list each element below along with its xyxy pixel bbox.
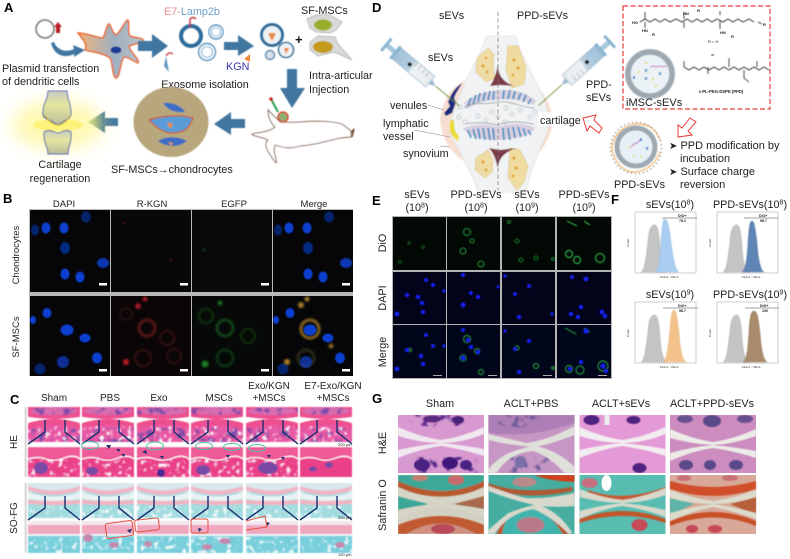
text: group headings: +MSCs — [252, 393, 286, 404]
text: group headings: Sham — [426, 398, 454, 410]
histogram: sEVs 10^8: Count — [626, 239, 630, 247]
text: column headings: ) — [592, 202, 596, 214]
arrow: injection to differentiation — [214, 112, 245, 135]
text: syringe label PPD-sEVs: PPD- — [586, 79, 612, 91]
micrograph: SF-MSCs merge — [273, 296, 353, 376]
divider: dashed center line — [497, 12, 499, 190]
text: venules: venules — [390, 100, 428, 112]
arrow: outlined red to cartilage — [583, 115, 602, 133]
panel B: fluorescence micrographs — [3, 191, 353, 376]
icon: regenerating joint — [12, 91, 104, 154]
histogram: PPD-sEVs 10^8: DiO+ — [759, 214, 768, 218]
panel letter C: C — [10, 392, 20, 407]
text: column headings: (10 — [464, 202, 480, 214]
micrograph: SF-MSCs R-KGN — [111, 296, 191, 376]
text: bullet PPD modification: ➤ PPD modification by — [669, 140, 780, 152]
icon: PPD-sEV vesicle — [610, 122, 662, 174]
histogram: PPD-sEVs 10^8: Count — [708, 239, 712, 247]
text: column headings: PPD-sEVs — [450, 189, 502, 201]
text: group headings: Exo/KGN — [248, 381, 290, 392]
micrograph: sEVs H&E — [580, 415, 666, 473]
histogram: PPD-sEVs 10^8: 98.7 — [760, 219, 767, 223]
text: row label DAPI: DAPI — [377, 285, 389, 311]
text: row label SO-FG: SO-FG — [9, 502, 20, 534]
histogram: PPD-sEVs 10^9: DiO+ — [760, 304, 768, 308]
text: reversion: reversion — [680, 179, 725, 191]
chemical structure: PEG-DSPE — [684, 58, 769, 82]
text: histogram heading PPD-sEVs 10^9: 9 — [780, 290, 784, 296]
histogram: sEVs 10^9: 98.7 — [679, 309, 686, 313]
arrow: cell to exosome — [138, 34, 168, 58]
icon: dendritic cell — [78, 20, 143, 78]
text: SF-MSCs to chondrocytes: SF-MSCs→chondrocytes — [111, 164, 233, 176]
icon: mouse outline with injection — [252, 97, 354, 163]
text: scale labels: 200 μm — [338, 515, 352, 520]
micrograph frame backdrop — [392, 216, 612, 379]
text: row label Safranin O: Safranin O — [377, 479, 389, 531]
micrograph: chondrocytes EGFP — [192, 210, 272, 292]
text: KGN: KGN — [226, 61, 249, 73]
text: histogram heading PPD-sEVs 10^9: ) — [783, 289, 787, 301]
text: group headings: +MSCs — [316, 393, 350, 404]
text: histogram heading sEVs 10^8: sEVs(10 — [646, 199, 687, 211]
histogram: sEVs 10^8: 78.2 — [679, 219, 686, 223]
text: regeneration: regeneration — [30, 173, 90, 185]
panel F: flow cytometry histograms — [611, 192, 787, 369]
text: chemistry atom labels: HO — [632, 20, 638, 25]
text: histogram heading sEVs 10^8: 8 — [687, 200, 691, 206]
text: group headings: ACLT+PPD-sEVs — [670, 398, 755, 410]
text: column headings: 9 — [531, 202, 535, 210]
arrow: exosome to KGN loading — [224, 35, 254, 56]
arrow: down to injection — [280, 69, 305, 108]
zoom guide lines — [28, 420, 352, 520]
histogram: PPD-sEVs 10^9 — [708, 302, 779, 369]
micrograph: sham Safranin O — [398, 475, 484, 534]
text: row label DiO: DiO — [377, 234, 389, 252]
text: histogram heading sEVs 10^9: sEVs(10 — [646, 289, 687, 301]
text: column headings: ) — [425, 202, 429, 214]
text: chemistry atom labels: HN — [683, 11, 689, 16]
micrograph: PPD-sEVs Safranin O — [669, 475, 757, 534]
icon: left syringe — [380, 38, 465, 112]
text: histogram heading PPD-sEVs 10^8: PPD-sEVs(10 — [713, 199, 780, 211]
panel letter E: E — [372, 193, 381, 208]
text: histogram heading sEVs 10^9: ) — [691, 289, 694, 301]
text: group headings: ACLT+PBS — [504, 398, 558, 410]
panel A: exosome schematic — [2, 0, 373, 185]
text: column headings: DAPI — [53, 199, 75, 210]
micrograph: PBS Safranin O — [488, 475, 575, 534]
box: iMSC-sEVs composition — [623, 6, 770, 109]
arrow: outlined red down-left — [678, 118, 696, 137]
text: chemistry atom labels: HN — [642, 28, 648, 33]
micrograph: PBS H&E — [488, 415, 575, 473]
icon: engineered exosomes — [164, 18, 223, 72]
image row: SO-FG — [25, 483, 352, 553]
text: R equals H: R = H — [708, 39, 718, 44]
text: chemistry atom labels — [632, 8, 766, 39]
histogram: sEVs 10^8 — [626, 212, 697, 279]
micrograph: chondrocytes R-KGN — [111, 210, 191, 292]
micrograph: chondrocytes merge — [273, 210, 353, 292]
text: vessel: vessel — [383, 131, 414, 143]
image row: HE — [25, 407, 352, 477]
text: group headings: PBS — [100, 393, 120, 404]
text: scale labels: 100 μm — [338, 552, 352, 557]
label: cartilage: cartilage — [540, 115, 581, 127]
histogram: sEVs 10^8: FL2-A :: PE-A — [660, 275, 678, 279]
histogram: PPD-sEVs 10^8 — [708, 212, 778, 279]
text: histogram heading sEVs 10^8: ) — [691, 199, 694, 211]
icon: iMSC-sEV vesicle — [625, 49, 675, 99]
text: or: or — [711, 52, 715, 57]
micrograph: PPD-sEVs H&E — [670, 415, 756, 473]
arrow: plasmid to cell — [51, 42, 85, 57]
text: group headings — [426, 398, 755, 410]
panel letter A: A — [4, 0, 14, 15]
icon: differentiated SF-MSCs disc — [134, 87, 208, 157]
micrograph: SF-MSCs EGFP — [192, 296, 272, 376]
text: row label HE: HE — [9, 435, 20, 449]
icon: loaded exosomes — [262, 24, 294, 60]
panel E: confocal uptake images — [372, 189, 612, 379]
text: column headings: ) — [484, 202, 488, 214]
text: plus sign: + — [295, 32, 303, 47]
panel letter D: D — [372, 0, 381, 15]
text: E7-Lamp2b: E7-Lamp2b — [164, 6, 220, 18]
icon: SF-MSC cells — [307, 15, 352, 60]
text: row label chondrocytes: Chondrocytes — [11, 225, 22, 284]
micrograph: chondrocytes DAPI — [30, 210, 110, 292]
leader lines — [414, 105, 450, 147]
text: intra-articular injection: Intra-articular — [309, 70, 373, 82]
text: scale labels: 200 μm — [338, 442, 352, 447]
white backing behind cartilage label — [538, 112, 585, 126]
micrograph: SF-MSCs DAPI — [30, 296, 110, 376]
panel letter G: G — [372, 391, 382, 406]
text: PPD-sEVs heading: PPD-sEVs — [517, 10, 569, 22]
icon: KGN triangle — [244, 54, 250, 62]
histogram: PPD-sEVs 10^9: FL2-A :: PE-A — [742, 365, 760, 369]
text: sEVs heading: sEVs — [439, 10, 465, 22]
histogram: sEVs 10^9: DiO+ — [678, 304, 686, 308]
text: column headings: (10 — [515, 202, 531, 214]
text: chemistry atom labels: HN — [720, 30, 726, 35]
text: column headings: (10 — [405, 202, 421, 214]
histogram: sEVs 10^9 — [626, 302, 698, 369]
text: histogram heading PPD-sEVs 10^9: PPD-sEVs(10 — [713, 289, 780, 301]
text: SF-MSCs: SF-MSCs — [301, 5, 348, 17]
text: column headings: sEVs — [514, 189, 540, 201]
text: column headings: sEVs — [404, 189, 430, 201]
text: plasmid transfection: Plasmid transfection — [2, 63, 99, 75]
text: chemistry atom labels: R — [731, 34, 734, 39]
text: bullet surface charge: ➤ Surface charge — [669, 166, 755, 178]
panel G: joint histology — [372, 391, 756, 534]
text: exosome isolation: Exosome isolation — [161, 79, 249, 91]
text: row label Merge: Merge — [377, 337, 389, 367]
micrograph: sEVs Safranin O — [579, 475, 666, 534]
chemical structure: polylysine — [640, 11, 762, 29]
panel letter B: B — [3, 191, 12, 206]
text: column headings: 9 — [588, 202, 592, 210]
histogram: PPD-sEVs 10^9: 100 — [762, 309, 768, 313]
text: histogram heading PPD-sEVs 10^8: ) — [783, 199, 787, 211]
annotation: green lesion ovals — [82, 442, 266, 452]
text: column headings: Merge — [301, 199, 327, 210]
text: chemistry atom labels: R — [763, 22, 766, 27]
text: PPD compound name: ε-PL-PEG-DSPE (PPD) — [699, 89, 744, 94]
text: column headings: PPD-sEVs — [558, 189, 610, 201]
micrograph frame backdrop — [29, 209, 353, 376]
text: incubation: incubation — [680, 153, 730, 165]
text: chemistry atom labels: R — [652, 32, 655, 37]
text: column headings — [53, 199, 327, 210]
text: group headings: MSCs — [205, 393, 233, 404]
text: column headings: R-KGN — [137, 199, 167, 210]
annotation: red lesion boxes — [105, 516, 267, 539]
text: column headings — [404, 189, 610, 214]
micrograph: sham H&E — [398, 415, 484, 473]
micrograph grid: DiO — [393, 217, 611, 270]
panel C: histology — [9, 381, 362, 557]
text: syringe label sEVs: sEVs — [428, 52, 454, 64]
panel D: joint schematic — [372, 0, 780, 192]
text: column headings: 8 — [421, 202, 425, 210]
text: row label SF-MSCs: SF-MSCs — [11, 316, 22, 358]
text: iMSC-sEVs: iMSC-sEVs — [626, 97, 683, 109]
histogram: PPD-sEVs 10^8: FL2-A :: PE-A — [742, 275, 760, 279]
text: column headings: ) — [535, 202, 539, 214]
panel letter F: F — [611, 192, 619, 207]
arrow: to regeneration — [88, 111, 118, 133]
text: group headings: ACLT+sEVs — [592, 398, 651, 410]
histogram: PPD-sEVs 10^9: Count — [708, 329, 712, 337]
text: group headings: Exo — [150, 393, 168, 404]
text: group headings: E7-Exo/KGN — [304, 381, 362, 392]
text: column headings: (10 — [572, 202, 588, 214]
icon: plasmid — [36, 20, 62, 38]
text: chemistry atom labels: R — [697, 8, 700, 13]
micrograph grid: merge — [393, 325, 611, 378]
text: lymphatic vessel: lymphatic — [383, 118, 429, 130]
icon: knee joint cross section — [440, 36, 553, 192]
text: column headings: 8 — [480, 202, 484, 210]
text: group headings — [41, 381, 362, 404]
text: histogram heading PPD-sEVs 10^8: 8 — [780, 200, 784, 206]
text: column headings: EGFP — [221, 199, 247, 210]
text: histogram heading sEVs 10^9: 9 — [687, 290, 691, 296]
annotation: arrowheads — [106, 445, 285, 533]
text: PPD-sEVs: PPD-sEVs — [614, 179, 666, 191]
text: of dendritic cells: of dendritic cells — [2, 76, 80, 88]
histogram: sEVs 10^9: FL2-A :: PE-A — [660, 365, 678, 369]
text: injection: Injection — [309, 84, 349, 96]
text: syringe label PPD-sEVs line 2: sEVs — [586, 92, 612, 104]
histogram: sEVs 10^9: Count — [626, 329, 630, 337]
text: scale labels — [338, 442, 352, 557]
micrograph grid: DAPI — [393, 272, 611, 324]
text: group headings: Sham — [41, 393, 67, 404]
text: row label H&E: H&E — [377, 432, 389, 454]
text: synovium: synovium — [403, 148, 449, 160]
icon: right syringe — [533, 35, 616, 112]
histogram: sEVs 10^8: DiO+ — [678, 214, 686, 218]
text: cartilage regeneration: Cartilage — [38, 159, 82, 171]
